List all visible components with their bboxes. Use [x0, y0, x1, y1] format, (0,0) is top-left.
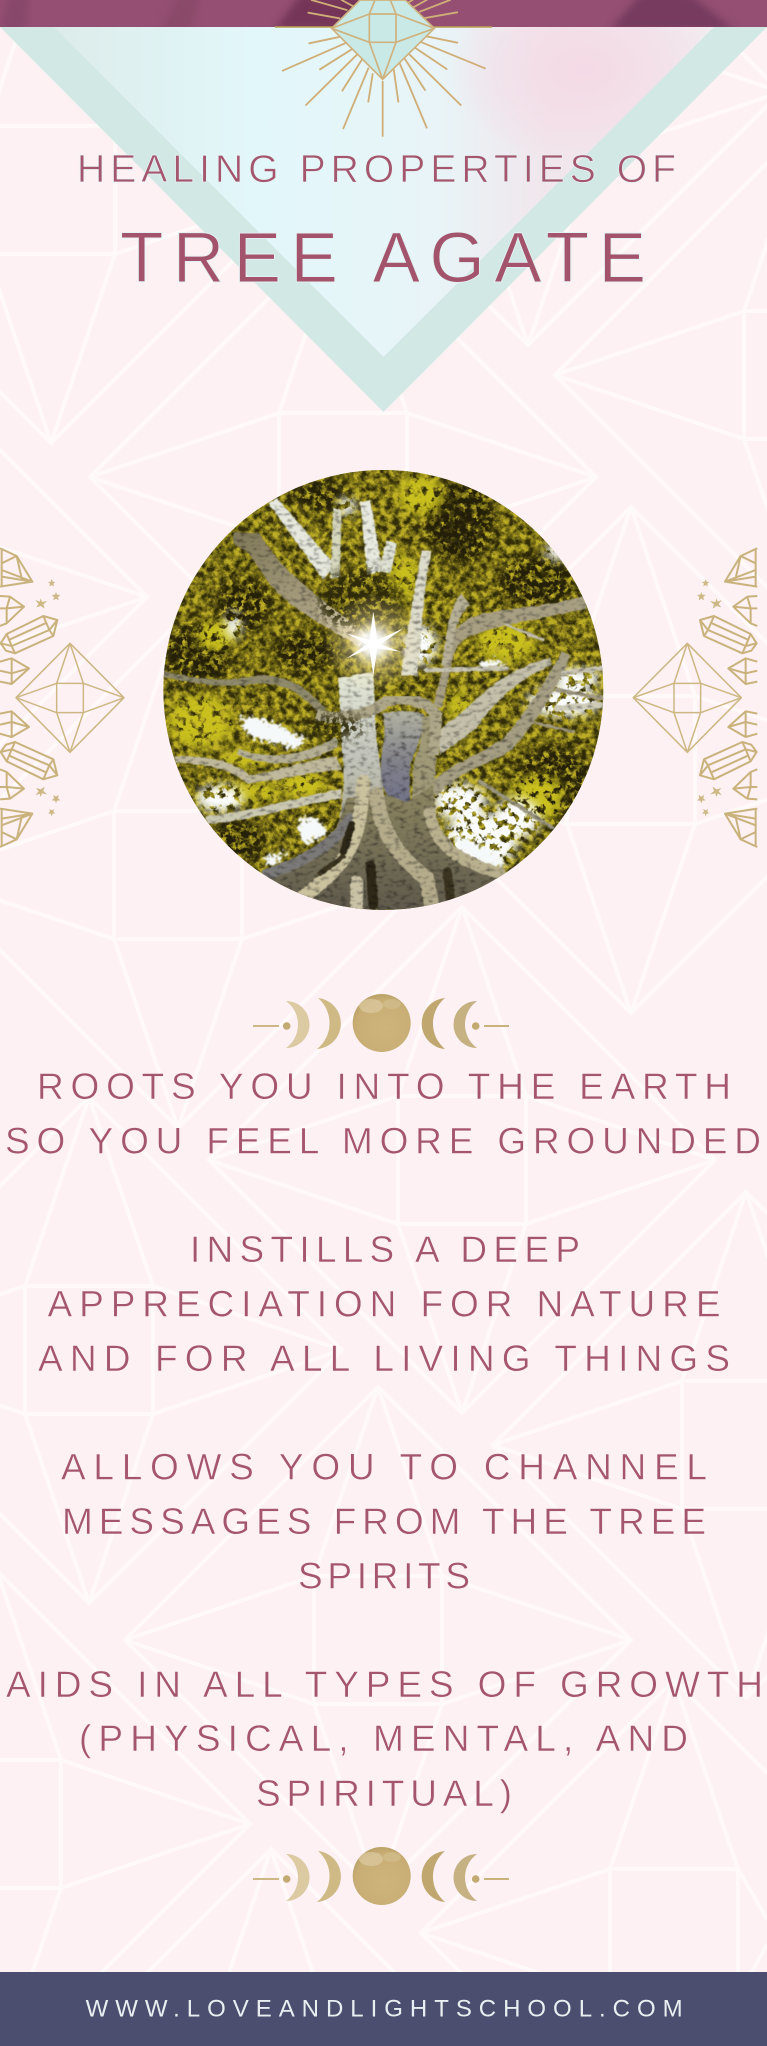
gold sunburst crystal [283, 0, 485, 136]
dark foliage masses [160, 478, 597, 865]
foliage base [160, 465, 610, 915]
watercolor pink wash [493, 27, 668, 116]
footer band [0, 1972, 767, 2046]
benefit 3 text: MESSAGES FROM THE TREE [62, 1501, 706, 1542]
header inverted triangle [0, 0, 767, 412]
triangle outer band [0, 27, 767, 412]
yellow sunlit leaves [167, 475, 563, 822]
heading: tree agate: TREE AGATE [120, 219, 646, 298]
central canopy cluster [318, 568, 402, 632]
benefit 4 text [6, 1664, 763, 1814]
benefit 1 text: ROOTS YOU INTO THE EARTH [37, 1066, 731, 1107]
sky gaps [197, 498, 600, 870]
benefit 2 text [38, 1229, 730, 1379]
benefit 3 text: SPIRITS [298, 1556, 470, 1597]
moon phases divider: top [253, 994, 509, 1052]
benefit 4 text: SPIRITUAL) [256, 1773, 512, 1814]
sunburst glare [326, 596, 416, 690]
circular tree photo illustration [160, 465, 610, 915]
open sky [240, 660, 507, 870]
right crystal cluster [633, 548, 757, 847]
sunburst rays [283, 0, 485, 136]
roots [267, 782, 500, 908]
moon phases divider: bottom [253, 1847, 509, 1905]
heading: healing properties of: HEALING PROPERTIES OF [77, 148, 676, 191]
benefit 1 text [5, 1066, 761, 1162]
website url: WWW.LOVEANDLIGHTSCHOOL.COM [86, 1996, 683, 2023]
benefit 3 text: ALLOWS YOU TO CHANNEL [61, 1446, 707, 1488]
benefit 2 text: AND FOR ALL LIVING THINGS [38, 1338, 730, 1379]
benefit 2 text: INSTILLS A DEEP [190, 1229, 580, 1270]
trunks [263, 672, 503, 910]
thin branches [427, 625, 603, 828]
tree branches [163, 498, 587, 824]
leaf cluster at fork [302, 714, 365, 739]
left crystal cluster [0, 548, 124, 847]
top plum bar [0, 0, 767, 30]
very dark canopy [433, 497, 480, 553]
benefit 1 text: SO YOU FEEL MORE GROUNDED [5, 1121, 761, 1162]
benefit 4 text: AIDS IN ALL TYPES OF GROWTH [6, 1664, 763, 1705]
benefit 3 text [61, 1446, 707, 1597]
benefit 4 text: (PHYSICAL, MENTAL, AND [79, 1718, 688, 1759]
benefit 2 text: APPRECIATION FOR NATURE [48, 1284, 720, 1325]
crystal diamond [332, 0, 434, 79]
arching limb [317, 699, 437, 755]
triangle inner watercolor [54, 27, 714, 357]
